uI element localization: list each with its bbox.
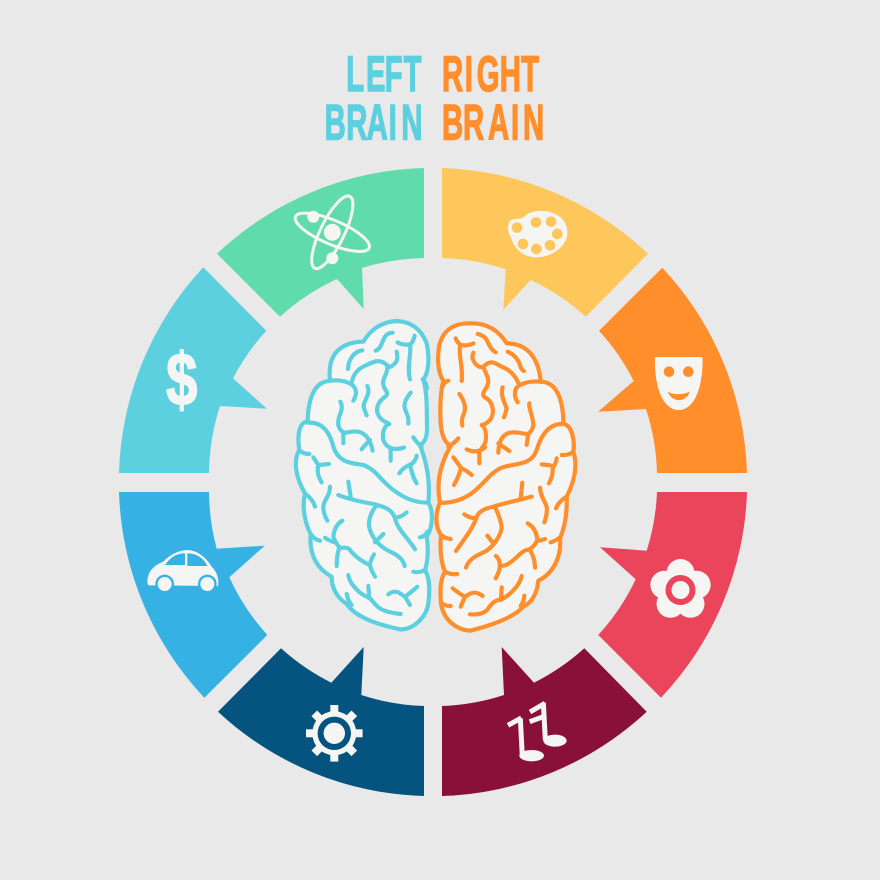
segment: maroon music bbox=[442, 647, 647, 796]
segment: yellow art bbox=[442, 168, 648, 317]
segment: navy engineering bbox=[218, 647, 424, 796]
segment: orange theatre bbox=[598, 268, 747, 473]
title: left brain: BRAIN bbox=[325, 94, 423, 151]
title: right brain: RIGHT bbox=[442, 46, 539, 102]
icon: atom bbox=[291, 191, 374, 274]
title: left brain: LEFT bbox=[346, 46, 422, 102]
brain: right hemisphere bbox=[436, 323, 575, 631]
segment: cyan finance bbox=[119, 267, 267, 473]
icon: theatre mask bbox=[655, 357, 703, 410]
title: left brain bbox=[325, 46, 423, 151]
icon: gear bbox=[306, 705, 363, 762]
title: right brain: BRAIN bbox=[442, 94, 544, 151]
icon: dollar sign: $ bbox=[166, 338, 197, 421]
icon: car bbox=[147, 550, 218, 593]
brain: left hemisphere bbox=[296, 321, 432, 629]
title: right brain bbox=[442, 46, 544, 151]
icon: music notes bbox=[508, 703, 567, 761]
icon: palette bbox=[508, 211, 567, 257]
segment: red nature bbox=[598, 492, 747, 698]
segment: green science bbox=[217, 168, 424, 317]
segment: blue car bbox=[119, 492, 267, 698]
icon: flower bbox=[650, 559, 711, 618]
